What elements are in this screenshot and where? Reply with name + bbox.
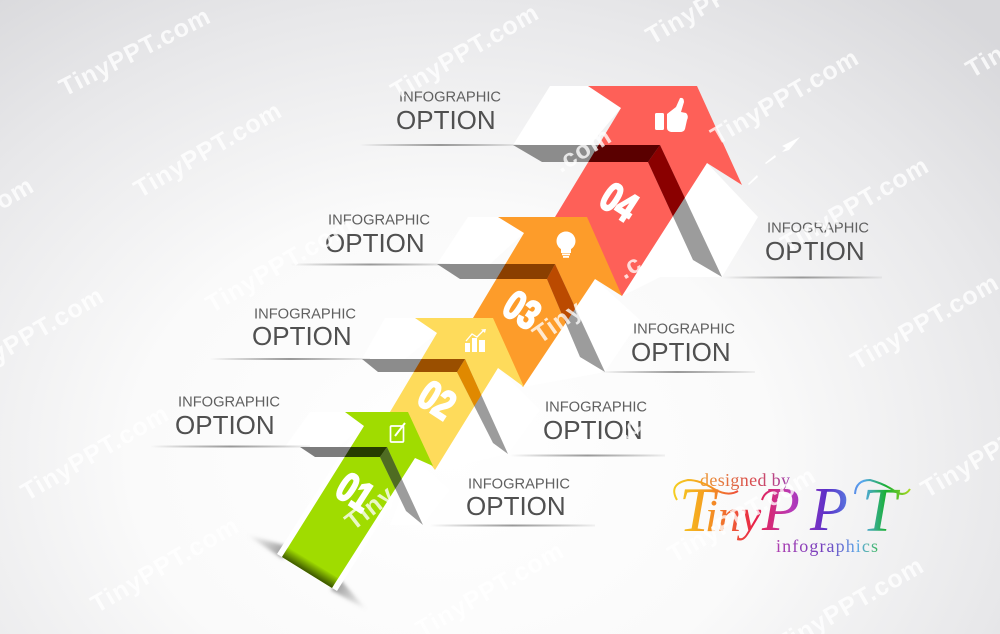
slit shadows at arrow tail <box>247 535 367 610</box>
icon: light bulb <box>556 232 576 258</box>
text: option 6 <box>543 400 647 445</box>
text: option 5: INFOGRAPHIC <box>468 476 570 492</box>
watermarks: Tiny <box>527 295 589 349</box>
text: option 7: INFOGRAPHIC <box>633 322 735 338</box>
text: option 1: OPTION <box>175 410 275 440</box>
text: option 3 <box>325 212 430 258</box>
watermarks: TinyPPT.com <box>846 268 1000 376</box>
text: option 4: INFOGRAPHIC <box>399 90 501 106</box>
fold shadow: arrow 1 <box>300 447 423 525</box>
watermarks: TinyPPT.com <box>86 511 244 619</box>
panel: option 4 backing and shadow line <box>360 86 621 146</box>
text: option 8: OPTION <box>765 236 865 266</box>
icon: growth chart <box>465 329 486 352</box>
text: option 3: OPTION <box>325 228 425 258</box>
text: option 6: INFOGRAPHIC <box>545 400 647 416</box>
number 04: 04 <box>592 173 647 231</box>
text: option 2: OPTION <box>252 321 352 351</box>
watermarks: TinyPPT.com <box>16 399 174 507</box>
fold shadow: arrow 3 <box>437 264 605 372</box>
tail shade on arrow 1 <box>282 547 338 588</box>
text: option 1 <box>175 394 280 440</box>
watermarks: TinyPPT.com <box>706 43 864 151</box>
panel: option 7 backing and shadow line <box>523 279 755 387</box>
watermarks: TinyPPT.com <box>129 96 287 204</box>
watermarks: .c <box>613 249 647 285</box>
panel: option 6 backing and shadow line <box>435 368 665 470</box>
icon: note and pencil <box>390 423 405 442</box>
text: option 1: INFOGRAPHIC <box>178 394 280 410</box>
arrow 4 red <box>555 86 742 296</box>
watermarks: .c <box>613 410 647 446</box>
text: option 4: OPTION <box>396 105 496 135</box>
logo: designed by TinyPPT infographics: designed by <box>700 470 790 490</box>
logo: designed by TinyPPT infographics: infographics <box>776 536 878 556</box>
text: option 8: INFOGRAPHIC <box>767 220 869 236</box>
text: option 2 <box>252 306 356 351</box>
panel: option 2 backing and shadow line <box>210 318 437 360</box>
text: option 5 <box>466 476 570 521</box>
arrow 2 yellow <box>390 318 524 470</box>
number 03: 03 <box>495 281 549 339</box>
logo: designed by TinyPPT infographics: iny <box>705 490 762 541</box>
text: option 3: INFOGRAPHIC <box>328 212 430 228</box>
arrow 1 green <box>282 412 433 588</box>
panel: option 8 backing and shadow line <box>622 163 882 296</box>
number 02: 02 <box>410 371 464 429</box>
text: option 7 <box>631 322 735 367</box>
panel: option 3 backing and shadow line <box>290 217 524 266</box>
panel: option 1 backing and shadow line <box>150 412 364 448</box>
icon: thumbs up <box>655 98 688 132</box>
watermarks: TinyPPT.com <box>663 461 821 569</box>
watermarks: Tiny <box>340 480 400 536</box>
text: option 4 <box>396 90 501 135</box>
watermarks: .com <box>549 122 617 178</box>
text: option 7: OPTION <box>631 337 731 367</box>
arrow 3 orange <box>473 217 622 387</box>
logo: designed by TinyPPT infographics <box>674 470 910 556</box>
watermarks: TinyPPT.com <box>776 151 934 259</box>
text: option 6: OPTION <box>543 415 643 445</box>
paper plane doodle <box>748 137 800 185</box>
panel: option 5 backing and shadow line <box>390 458 595 526</box>
text: option 2: INFOGRAPHIC <box>254 306 356 322</box>
watermarks: TinyPPT.com <box>201 211 359 319</box>
text: option 8 <box>765 220 869 266</box>
logo: designed by TinyPPT infographics: PP <box>761 476 848 544</box>
logo: designed by TinyPPT infographics: T <box>862 477 901 545</box>
fold shadow: arrow 4 <box>513 145 722 277</box>
watermarks: TinyPPT.com <box>386 0 544 106</box>
watermarks: TinyPPT.com <box>55 2 215 102</box>
white ribbon behind arrow 1 <box>277 426 420 591</box>
fold shadow: arrow 2 <box>362 359 508 454</box>
text: option 5: OPTION <box>466 491 566 521</box>
number 01: 01 <box>328 463 382 521</box>
logo: designed by TinyPPT infographics: T <box>679 474 719 545</box>
